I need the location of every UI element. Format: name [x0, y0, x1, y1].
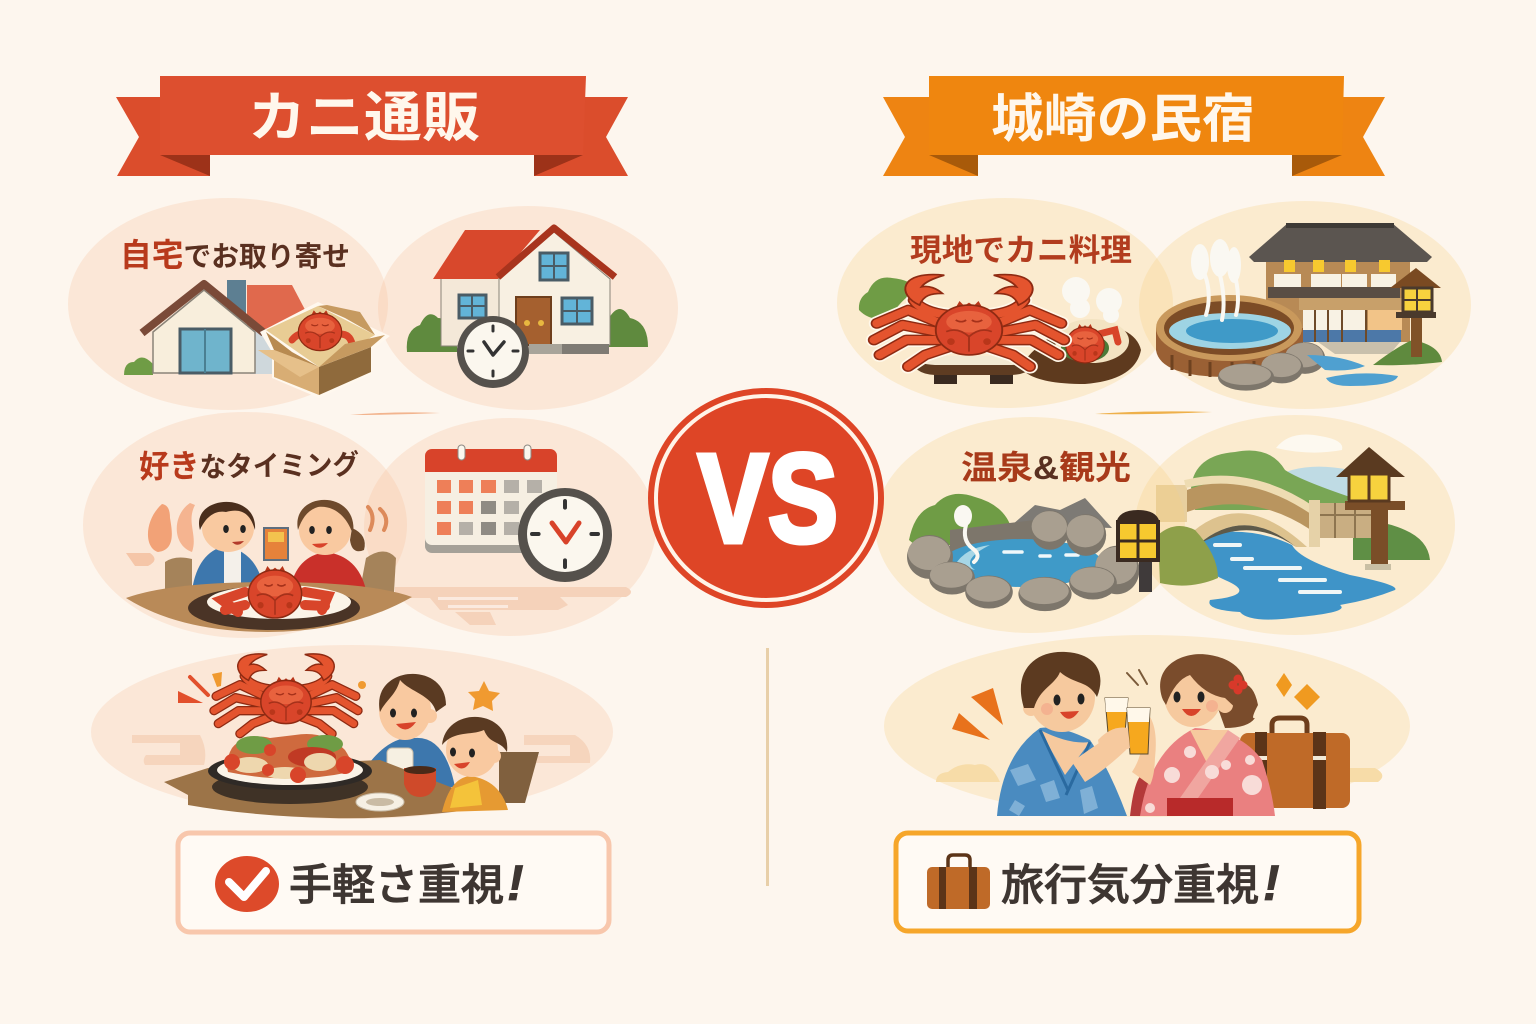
- illustration: small plate: [356, 793, 404, 811]
- illustration: suitcase: [1240, 718, 1350, 809]
- illustration: family at table: [126, 500, 412, 632]
- icon: beer glasses: [1098, 698, 1150, 754]
- panel: 温泉&観光: [875, 417, 1218, 633]
- icon: star: [468, 681, 500, 711]
- callout text: 手軽さ重視!: 手軽さ重視: [289, 862, 504, 910]
- table streaks: [395, 587, 631, 625]
- illustration: woman in yukata: [1130, 654, 1275, 816]
- banner title: カニ通販: カニ通販: [248, 88, 480, 148]
- icon: clock: [518, 488, 612, 582]
- icon: clock: [457, 316, 529, 388]
- illustration: rock hot spring: [907, 494, 1218, 611]
- label: 好きなタイミング: 好きなタイミング: [139, 445, 359, 485]
- icon: calendar: [425, 445, 557, 553]
- illustration: bridge scene: [1156, 434, 1430, 620]
- illustration: parent: [370, 674, 455, 787]
- illustration: crab dish: [859, 275, 1141, 384]
- icon: stones: [1218, 342, 1325, 391]
- panel: family enjoying crab at home: [91, 645, 613, 819]
- panel: 現地でカニ料理: [837, 198, 1173, 408]
- illustration: table: [164, 760, 500, 818]
- icon: box of crab: [258, 302, 390, 398]
- icon: red-roof house: [407, 228, 648, 354]
- icon: lantern: [1373, 268, 1442, 365]
- panel: 好きなタイミング: [83, 412, 412, 638]
- illustration: man in yukata: [997, 652, 1127, 816]
- illustration: dish: [208, 734, 372, 804]
- banner: カニ通販: [116, 76, 628, 176]
- icon: crab: [214, 654, 358, 734]
- callout: 旅行気分重視!: [896, 833, 1359, 931]
- panel: house with clock: [378, 206, 678, 410]
- icon: suitcase: [927, 855, 990, 909]
- badge: VS: [648, 388, 884, 608]
- icon: check mark: [215, 856, 279, 912]
- label: 自宅でお取り寄せ: 自宅でお取り寄せ: [120, 237, 350, 273]
- callout: 手軽さ重視!: [178, 833, 609, 932]
- streaks: [132, 735, 590, 765]
- illustration: child: [404, 717, 508, 812]
- panel: bridge and river: [1135, 415, 1455, 635]
- panel: couple toasting: [884, 635, 1410, 817]
- illustration: clouds: [936, 764, 1382, 782]
- divider: [766, 648, 769, 886]
- icon: wooden hot tub: [1156, 239, 1303, 377]
- label: 温泉&観光: 温泉&観光: [961, 449, 1131, 486]
- banner title: 城崎の民宿: 城崎の民宿: [991, 91, 1255, 149]
- illustration: ryokan building: [1249, 223, 1432, 354]
- panel: 自宅でお取り寄せ: [68, 198, 390, 410]
- illustration: chair: [499, 752, 539, 803]
- decorative accents: [350, 411, 1212, 415]
- label: 現地でカニ料理: 現地でカニ料理: [910, 233, 1132, 268]
- badge text: VS: VS: [698, 428, 838, 569]
- callout text: 手軽さ重視!: !: [507, 855, 524, 911]
- callout text: 旅行気分重視!: 旅行気分重視: [1001, 862, 1259, 910]
- icon: sparks: [178, 672, 366, 703]
- icon: house: [124, 280, 312, 375]
- panel: ryokan with hot tub: [1139, 201, 1471, 409]
- panel: calendar with clock: [364, 418, 656, 636]
- stream: [1307, 355, 1398, 386]
- icon: orange sparks: [952, 688, 1003, 740]
- banner: 城崎の民宿: [883, 76, 1385, 176]
- callout text: 旅行気分重視!: !: [1263, 855, 1280, 911]
